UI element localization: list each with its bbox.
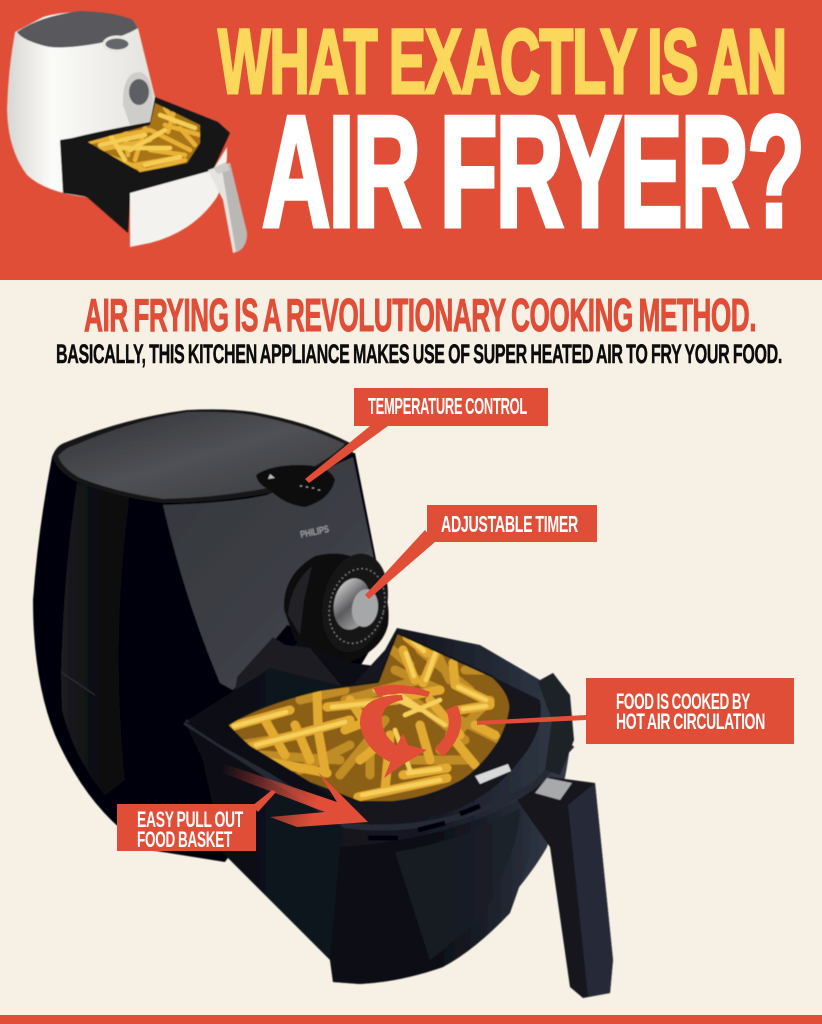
small fryer fries — [88, 103, 200, 172]
metal latch — [475, 764, 511, 784]
header band — [0, 0, 822, 280]
callout: food basket: FOOD BASKET — [137, 827, 233, 852]
callout: temperature control: TEMPERATURE CONTROL — [368, 393, 527, 419]
brand mark: PHILIPS — [299, 524, 330, 541]
grey body reflection — [163, 457, 383, 690]
basket drawer — [185, 628, 571, 984]
lid — [52, 409, 353, 503]
callout: adjustable timer — [365, 505, 597, 599]
right basket inner rim — [360, 677, 541, 825]
callout: adjustable timer: ADJUSTABLE TIMER — [441, 511, 579, 537]
bottom bar — [0, 1015, 822, 1024]
callout: temperature control — [305, 388, 548, 483]
timer knob housing — [284, 547, 397, 662]
callout: food basket: EASY PULL OUT — [137, 807, 244, 832]
small fryer dial — [104, 37, 130, 51]
big arrow to basket — [220, 763, 368, 827]
temperature dial — [256, 465, 335, 507]
small fryer lid — [17, 11, 138, 47]
small white air fryer photo — [7, 11, 247, 253]
fryer handle — [517, 777, 613, 998]
small fryer drawer front — [130, 147, 227, 247]
small fryer handle — [208, 162, 247, 253]
handle release button — [535, 778, 572, 800]
left reflection — [61, 483, 130, 795]
drawer rim — [185, 722, 572, 828]
small fryer timer knob — [123, 72, 153, 125]
seam line — [61, 672, 95, 695]
callout: hot air circulation — [477, 678, 794, 744]
main black air fryer photo — [33, 409, 613, 998]
knob bracket — [280, 640, 382, 690]
basket inner wall — [185, 722, 360, 815]
fryer body — [33, 453, 388, 862]
basket fries — [226, 633, 510, 802]
rim clip — [538, 673, 574, 775]
small fryer inner drawer — [60, 97, 230, 233]
drawer front panel — [330, 785, 547, 984]
circulating air arrows — [360, 685, 461, 778]
drawer vents — [368, 806, 480, 838]
callout: food basket — [117, 790, 276, 852]
